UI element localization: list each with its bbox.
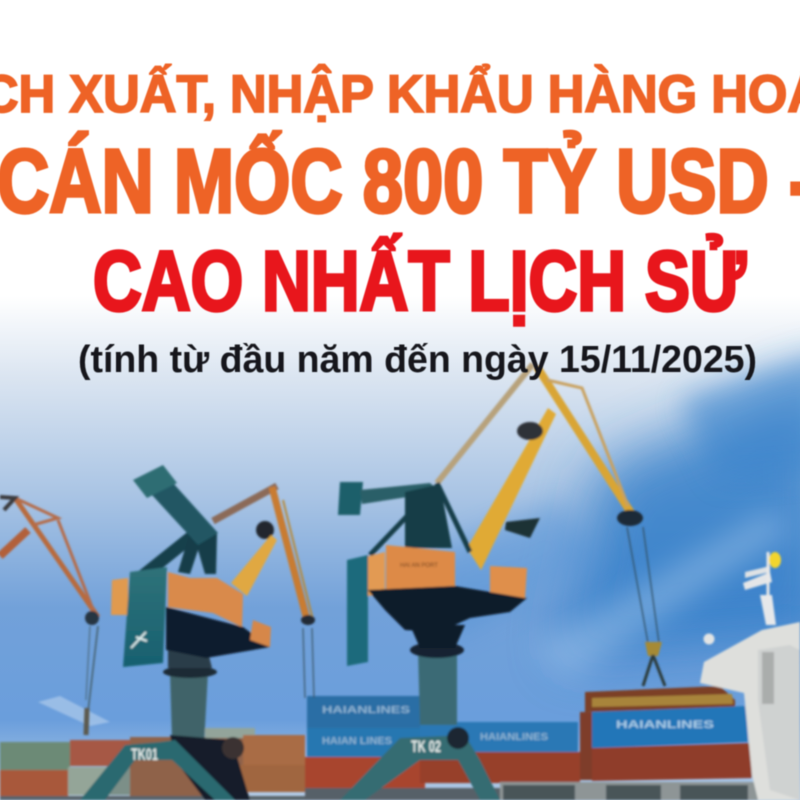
crane 2 teal panel [347,555,368,666]
crane 1 gantry base with TK01 plate: TK01 [131,745,158,764]
crane 1 teal panel with logo [123,567,167,667]
crane 1 counterweight arm [133,465,218,574]
left crane, orange [0,497,99,735]
title block [0,63,800,381]
crane 2 gantry base with TK 02 plate: TK 02 [411,737,441,756]
containers: left stack [0,728,305,800]
containers: blue Hai An stack: HAIANLINES [480,732,548,743]
ship superstructure [700,552,800,800]
crane 2 (center-right) [338,364,665,800]
containers: blue Hai An stack: HAIAN LINES [322,736,392,747]
crane 1 machine house [111,572,271,658]
crane 2 machine house: HAI AN PORT [400,563,438,569]
port scene: containers, ship and cranes [0,364,800,800]
containers: lifted stack on the right [500,686,758,800]
crane 2 column and flange [410,625,465,725]
crane 1 jib, boom and wires [213,486,315,698]
crane 1 column and flange [163,640,217,745]
crane 1 (center) [80,465,315,800]
crane 2 counterweight arm [338,482,470,555]
crane 1 gantry base with TK01 plate [80,735,250,800]
containers: lifted stack on the right: HAIANLINES [616,719,714,731]
crane 2 jib, boom and wires [437,364,665,686]
containers: blue Hai An stack [305,696,580,800]
crane 2 machine house [366,545,527,632]
containers: blue Hai An stack: HAIANLINES [322,705,410,716]
crane 2 gantry base with TK 02 plate [340,727,500,800]
subtitle: date range: (tính từ đầu năm đến ngày 15/11/2025) [78,339,757,381]
